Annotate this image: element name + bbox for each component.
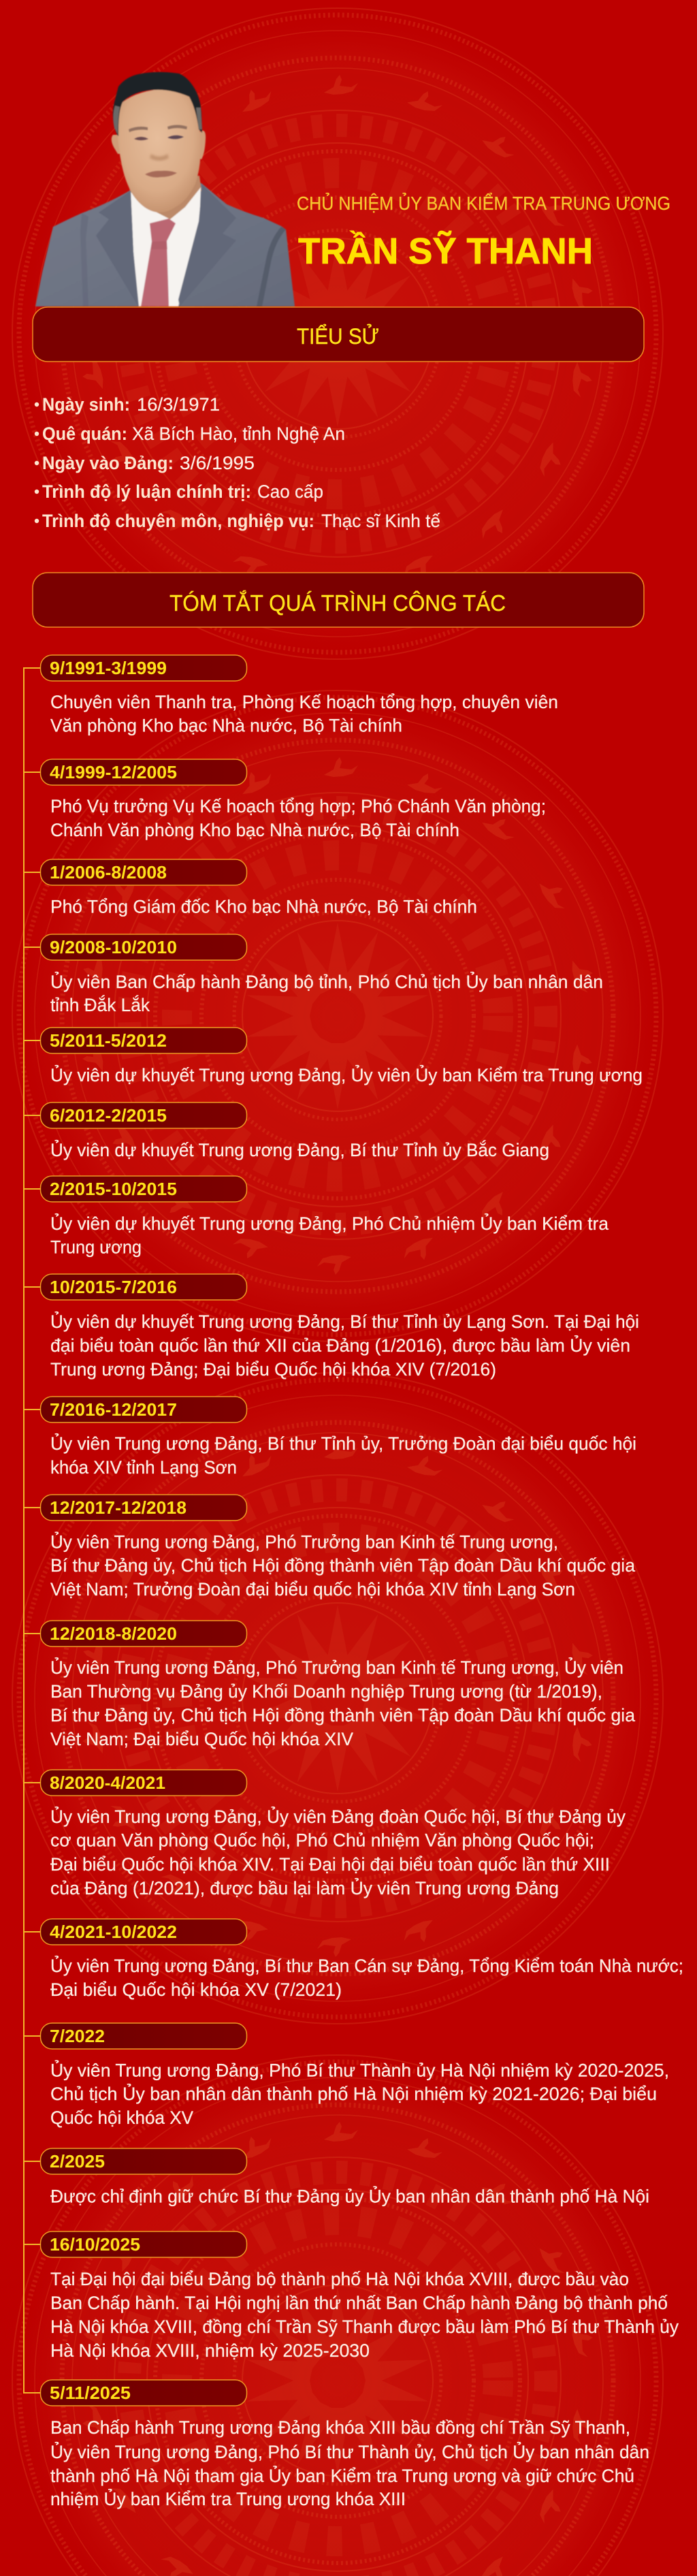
timeline entry: 5/11/2025: nhiệm Ủy ban Kiểm tra Trung ương khóa XIII <box>50 2489 406 2509</box>
bio: political theory level: Trình độ lý luận chính trị: <box>42 481 251 502</box>
timeline entry: 10/2015-7/2016: đại biểu toàn quốc lần thứ XII của Đảng (1/2016), được bầu làm Ủy viên <box>50 1335 630 1356</box>
timeline entry: 9/2008-10/2010 <box>24 934 603 1015</box>
timeline entry: 9/2008-10/2010: Ủy viên Ban Chấp hành Đảng bộ tỉnh, Phó Chủ tịch Ủy ban nhân dân <box>50 972 603 992</box>
timeline entry: 4/2021-10/2022: Đại biểu Quốc hội khóa XV (7/2021) <box>50 1979 342 2000</box>
section heading: Tiểu sử <box>33 307 644 362</box>
timeline entry: 5/11/2025: 5/11/2025 <box>50 2383 131 2403</box>
timeline entry: 12/2018-8/2020 <box>24 1621 635 1749</box>
timeline entry: 16/10/2025: 16/10/2025 <box>50 2234 140 2255</box>
timeline entry: 1/2006-8/2008: Phó Tổng Giám đốc Kho bạc Nhà nước, Bộ Tài chính <box>50 896 477 917</box>
timeline entry: 2/2015-10/2015: Trung ương <box>50 1237 142 1257</box>
bio: professional level: Trình độ chuyên môn, nghiệp vụ: <box>42 511 314 531</box>
timeline entry: 8/2020-4/2021: của Đảng (1/2021), được bầu lại làm Ủy viên Trung ương Đảng <box>50 1878 559 1898</box>
head and face <box>112 89 206 212</box>
biography list <box>35 394 440 531</box>
timeline entry: 12/2018-8/2020: 12/2018-8/2020 <box>50 1623 177 1644</box>
timeline entry: 7/2022: Ủy viên Trung ương Đảng, Phó Bí thư Thành ủy Hà Nội nhiệm kỳ 2020-2025, <box>50 2061 669 2081</box>
timeline entry: 7/2022: 7/2022 <box>50 2026 105 2046</box>
timeline entry: 4/2021-10/2022 <box>24 1919 683 2000</box>
timeline entry: 1/2006-8/2008 <box>24 859 477 917</box>
timeline entry: 9/1991-3/1999 <box>24 655 558 735</box>
timeline entry: 6/2012-2/2015: Ủy viên dự khuyết Trung ương Đảng, Bí thư Tỉnh ủy Bắc Giang <box>50 1140 549 1160</box>
timeline entry: 9/1991-3/1999: 9/1991-3/1999 <box>50 658 167 678</box>
facial features <box>129 125 187 177</box>
bio: birth date: 16/3/1971 <box>137 394 220 415</box>
timeline entry: 8/2020-4/2021 <box>24 1770 626 1898</box>
timeline entry: 5/11/2025: thành phố Hà Nội tham gia Ủy ban Kiểm tra Trung ương và giữ chức Chủ <box>50 2466 634 2486</box>
timeline entry: 12/2017-12/2018: Việt Nam; Trưởng Đoàn đại biểu quốc hội khóa XIV tỉnh Lạng Sơn <box>50 1579 575 1600</box>
timeline entry: 7/2022: Chủ tịch Ủy ban nhân dân thành phố Hà Nội nhiệm kỳ 2021-2026; Đại biểu <box>50 2084 657 2104</box>
timeline entry: 16/10/2025: Hà Nội khóa XVIII, đồng chí Trần Sỹ Thanh được bầu làm Phó Bí thư Thành ủy <box>50 2317 679 2337</box>
timeline entry: 4/1999-12/2005: Phó Vụ trưởng Vụ Kế hoạch tổng hợp; Phó Chánh Văn phòng; <box>50 796 546 816</box>
timeline entry: 8/2020-4/2021: Ủy viên Trung ương Đảng, Ủy viên Đảng đoàn Quốc hội, Bí thư Đảng ủy <box>50 1807 626 1827</box>
timeline entry: 7/2016-12/2017 <box>24 1397 636 1478</box>
timeline entry: 12/2018-8/2020: Việt Nam; Đại biểu Quốc hội khóa XIV <box>50 1729 353 1749</box>
section heading: work history <box>33 573 644 627</box>
timeline entry: 2/2025: Được chỉ định giữ chức Bí thư Đảng ủy Ủy ban nhân dân thành phố Hà Nội <box>50 2186 649 2206</box>
timeline entry: 4/2021-10/2022: Ủy viên Trung ương Đảng, Bí thư Ban Cán sự Đảng, Tổng Kiểm toán Nhà nước; <box>50 1956 683 1976</box>
timeline entry: 10/2015-7/2016: Trung ương Đảng; Đại biểu Quốc hội khóa XIV (7/2016) <box>50 1359 496 1380</box>
timeline entry: 12/2017-12/2018: Ủy viên Trung ương Đảng, Phó Trưởng ban Kinh tế Trung ương, <box>50 1532 558 1553</box>
timeline entry: 5/11/2025: Ủy viên Trung ương Đảng, Phó Bí thư Thành ủy, Chủ tịch Ủy ban nhân dân <box>50 2442 649 2462</box>
timeline entry: 9/2008-10/2010: tỉnh Đắk Lắk <box>50 995 150 1015</box>
bio: professional level: Thạc sĩ Kinh tế <box>321 511 440 531</box>
timeline entry: 2/2015-10/2015: 2/2015-10/2015 <box>50 1179 177 1199</box>
timeline entry: 7/2022 <box>24 2023 669 2128</box>
timeline entry: 7/2016-12/2017: 7/2016-12/2017 <box>50 1399 177 1420</box>
timeline entry: 4/2021-10/2022: 4/2021-10/2022 <box>50 1922 177 1942</box>
bio: hometown: Xã Bích Hào, tỉnh Nghệ An <box>132 424 345 444</box>
suit jacket <box>35 181 295 306</box>
section heading: Tiểu sử: TIỂU SỬ <box>297 324 379 349</box>
timeline entry: 6/2012-2/2015: 6/2012-2/2015 <box>50 1105 167 1126</box>
timeline entry: 8/2020-4/2021: Đại biểu Quốc hội khóa XIV. Tại Đại hội đại biểu toàn quốc lần thứ XIII <box>50 1854 610 1875</box>
timeline entry: 12/2017-12/2018: Bí thư Đảng ủy, Chủ tịch Hội đồng thành viên Tập đoàn Dầu khí quốc gia <box>50 1555 635 1576</box>
bio: hometown <box>35 424 345 444</box>
timeline entry: 8/2020-4/2021: cơ quan Văn phòng Quốc hội, Phó Chủ nhiệm Văn phòng Quốc hội; <box>50 1830 594 1851</box>
timeline entry: 5/2011-5/2012 <box>24 1028 643 1085</box>
timeline entry: 7/2016-12/2017: Ủy viên Trung ương Đảng, Bí thư Tỉnh ủy, Trưởng Đoàn đại biểu quốc hội <box>50 1433 636 1454</box>
timeline entry: 8/2020-4/2021: 8/2020-4/2021 <box>50 1772 165 1793</box>
bio: party entry: Ngày vào Đảng: <box>42 453 174 473</box>
bio: birth date: Ngày sinh: <box>42 394 130 415</box>
left lapel <box>96 191 138 306</box>
timeline entry: 12/2018-8/2020: Ban Thường vụ Đảng ủy Khối Doanh nghiệp Trung ương (từ 1/2019), <box>50 1681 602 1702</box>
timeline entry: 2/2015-10/2015 <box>24 1176 609 1257</box>
timeline entry: 12/2017-12/2018: 12/2017-12/2018 <box>50 1497 187 1518</box>
timeline entry: 5/11/2025: Ban Chấp hành Trung ương Đảng khóa XIII bầu đồng chí Trần Sỹ Thanh, <box>50 2417 630 2438</box>
timeline entry: 16/10/2025 <box>24 2231 679 2361</box>
timeline entry: 16/10/2025: Tại Đại hội đại biểu Đảng bộ thành phố Hà Nội khóa XVIII, được bầu vào <box>50 2269 629 2289</box>
bio: party entry: 3/6/1995 <box>180 453 255 473</box>
timeline entry: 9/1991-3/1999: Chuyên viên Thanh tra, Phòng Kế hoạch tổng hợp, chuyên viên <box>50 692 558 712</box>
timeline entry: 5/2011-5/2012: Ủy viên dự khuyết Trung ương Đảng, Ủy viên Ủy ban Kiểm tra Trung ương <box>50 1065 643 1085</box>
timeline entry: 5/11/2025 <box>24 2380 649 2509</box>
timeline entry: 9/2008-10/2010: 9/2008-10/2010 <box>50 937 177 957</box>
timeline entry: 9/1991-3/1999: Văn phòng Kho bạc Nhà nước, Bộ Tài chính <box>50 715 402 735</box>
timeline entry: 5/2011-5/2012: 5/2011-5/2012 <box>50 1030 167 1051</box>
necktie <box>141 219 176 306</box>
timeline entry: 2/2025 <box>24 2148 649 2206</box>
hair <box>113 72 202 136</box>
bio: hometown: Quê quán: <box>42 424 127 444</box>
timeline entry: 10/2015-7/2016 <box>24 1274 639 1380</box>
bio: political theory level: Cao cấp <box>257 481 323 502</box>
timeline entry: 12/2018-8/2020: Ủy viên Trung ương Đảng, Phó Trưởng ban Kinh tế Trung ương, Ủy viên <box>50 1657 623 1678</box>
timeline entry: 4/1999-12/2005: 4/1999-12/2005 <box>50 762 177 782</box>
timeline entry: 2/2015-10/2015: Ủy viên dự khuyết Trung ương Đảng, Phó Chủ nhiệm Ủy ban Kiểm tra <box>50 1213 609 1234</box>
section heading: work history: TÓM TẮT QUÁ TRÌNH CÔNG TÁC <box>169 590 506 616</box>
timeline entry: 6/2012-2/2015 <box>24 1102 549 1160</box>
right lapel <box>178 185 236 306</box>
title: name: TRẦN SỸ THANH <box>298 231 593 272</box>
timeline spine <box>23 667 25 2394</box>
portrait photo illustration <box>35 72 295 306</box>
timeline entry: 12/2017-12/2018 <box>24 1495 635 1600</box>
timeline entry: 7/2016-12/2017: khóa XIV tỉnh Lạng Sơn <box>50 1457 237 1478</box>
timeline entry: 10/2015-7/2016: 10/2015-7/2016 <box>50 1277 177 1297</box>
shirt <box>131 187 201 306</box>
timeline entry: 2/2025: 2/2025 <box>50 2151 105 2172</box>
timeline entry: 16/10/2025: Hà Nội khóa XVIII, nhiệm kỳ 2025-2030 <box>50 2340 370 2361</box>
timeline entry: 4/1999-12/2005: Chánh Văn phòng Kho bạc Nhà nước, Bộ Tài chính <box>50 820 459 840</box>
timeline entry: 7/2022: Quốc hội khóa XV <box>50 2108 193 2128</box>
timeline entry: 12/2018-8/2020: Bí thư Đảng ủy, Chủ tịch Hội đồng thành viên Tập đoàn Dầu khí quốc gia <box>50 1705 635 1726</box>
bio: birth date <box>35 394 220 415</box>
neck <box>128 176 201 221</box>
timeline entry: 4/1999-12/2005 <box>24 759 546 840</box>
bio: party entry <box>35 453 255 473</box>
timeline entry: 1/2006-8/2008: 1/2006-8/2008 <box>50 862 167 882</box>
timeline entry: 10/2015-7/2016: Ủy viên dự khuyết Trung ương Đảng, Bí thư Tỉnh ủy Lạng Sơn. Tại Đại hội <box>50 1311 639 1332</box>
timeline entry: 16/10/2025: Ban Chấp hành. Tại Hội nghị lần thứ nhất Ban Chấp hành Đảng bộ thành phố <box>50 2293 668 2313</box>
